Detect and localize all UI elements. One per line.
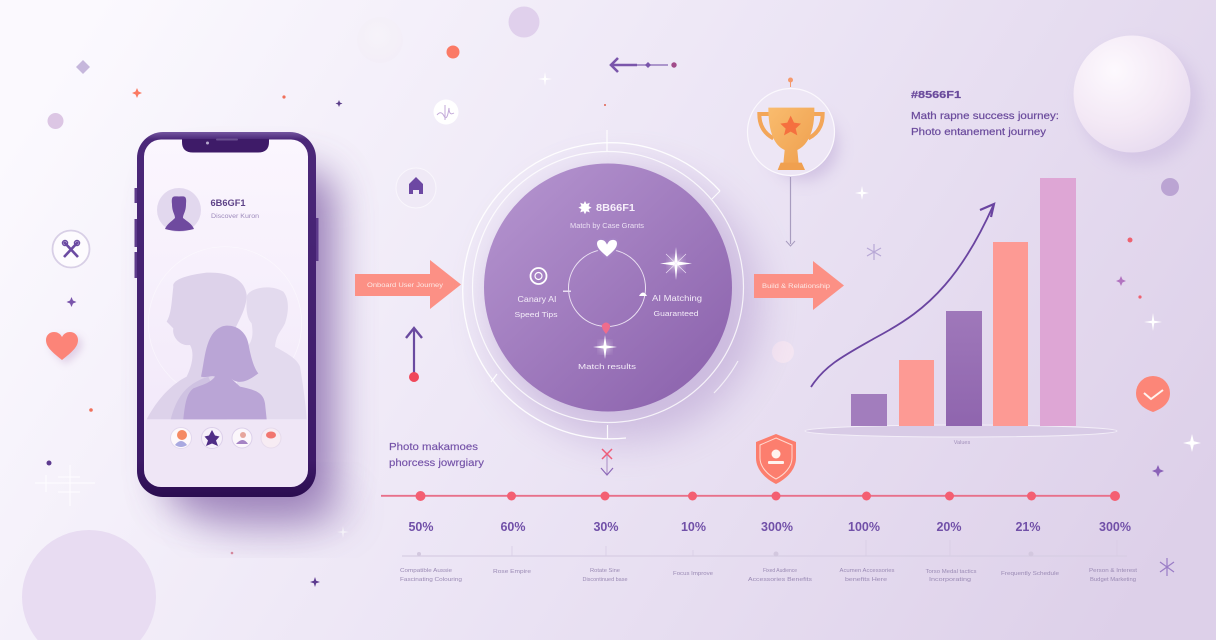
timeline labels: Person & Interest: [1089, 568, 1137, 574]
icon: red cross with arrow: [601, 449, 613, 475]
icon: check pin: [1136, 376, 1170, 412]
timeline labels: Budget Marketing: [1090, 577, 1136, 583]
sphere: large bottom left: [22, 530, 156, 640]
phone bottom bar: [146, 420, 306, 485]
timeline percentages: 20%: [936, 520, 962, 534]
arrow: coral to disc: Onboard User Journey: [367, 282, 444, 289]
timeline percentages: [408, 520, 1131, 534]
rings: [463, 130, 744, 439]
asterisks: [867, 244, 1174, 576]
chart base: [805, 425, 1117, 437]
people silhouettes: [147, 247, 307, 419]
panel: trophy badge: [748, 78, 838, 246]
chart heading: Math rapne success journey:: [911, 110, 1059, 122]
arrow: coral to chart: Build & Relationship: [762, 283, 830, 290]
label: left: Canary AI: [518, 295, 556, 304]
timeline labels: Focus Improve: [673, 571, 713, 577]
ring markers: [563, 290, 647, 296]
phone notch: [182, 138, 269, 152]
profile avatar: [157, 188, 201, 232]
connector arrow: [786, 177, 795, 246]
label: bottom: Match results: [578, 362, 636, 371]
profile text: [210, 198, 259, 220]
white sparkles: [337, 72, 1201, 538]
icon: shield: [756, 434, 796, 484]
badge shadow: [770, 112, 838, 180]
disc heading: 8B66F1: [596, 203, 635, 214]
disc subheading: Match by Case Grants: [570, 223, 645, 230]
icon: top sprout badge: [434, 100, 458, 124]
panel: central match disc: [463, 130, 760, 440]
timeline percentages: 60%: [500, 520, 526, 534]
chart heading: [911, 89, 1059, 138]
icon: sparkle bottom: [593, 335, 617, 359]
dot: lilac top: [508, 6, 540, 38]
timeline title: [389, 441, 485, 469]
timeline lower axis: [402, 540, 1127, 556]
sphere: large top right: [1074, 36, 1200, 164]
timeline axis dots: [417, 552, 1034, 556]
timeline labels: Fixed Audience: [763, 568, 797, 574]
trend arrow: [811, 204, 994, 387]
arrow: top left-pointing: [611, 58, 677, 72]
label: left: Speed Tips: [514, 312, 558, 319]
bars: [851, 178, 1076, 426]
timeline dots: [416, 491, 1120, 501]
disc: [484, 164, 732, 412]
timeline percentages: 50%: [408, 520, 434, 534]
timeline percentages: 10%: [681, 520, 706, 534]
disc shadow: [490, 170, 760, 440]
app icons: [170, 428, 281, 448]
sphere: faint top: [357, 17, 403, 63]
icon: camera ring: [530, 268, 546, 284]
timeline line: [381, 495, 1115, 497]
timeline labels: Fascinating Colouring: [400, 577, 462, 583]
icon: sparkle right: [660, 247, 692, 280]
timeline labels: Incorporating: [929, 577, 971, 583]
icon: pink pin: [602, 322, 610, 334]
timeline labels: Discontinued base: [582, 577, 628, 583]
chart heading: #8566F1: [911, 89, 961, 101]
dot: pink ball: [772, 341, 794, 363]
timeline: [381, 491, 1137, 583]
sparkle cluster bottom left: [35, 465, 95, 506]
profile text: 6B6GF1: [210, 198, 246, 209]
timeline labels: Accessories Benefits: [748, 577, 812, 583]
panel: phone: [134, 132, 350, 534]
disc heading: [578, 201, 635, 214]
icon: app coral: [261, 428, 281, 448]
icon: house badge: [396, 168, 436, 208]
timeline labels: [400, 568, 1137, 583]
timeline percentages: 100%: [848, 520, 880, 534]
phone shadow: [165, 170, 350, 534]
label: right: AI Matching: [652, 294, 702, 303]
phone frame: [137, 132, 316, 497]
inner ring: [568, 250, 646, 326]
phone screen: [144, 140, 308, 487]
profile text: Discover Kuron: [211, 214, 259, 220]
badge circle: [748, 88, 834, 176]
trophy: [759, 108, 823, 170]
orange pin: [788, 78, 793, 87]
timeline percentages: 21%: [1015, 520, 1041, 534]
arrow: coral to disc: [355, 260, 461, 309]
icon: app avatar: [232, 428, 252, 448]
timeline labels: Frequently Schedule: [1001, 571, 1059, 577]
chart caption: Values: [954, 440, 970, 446]
icon: tools badge: [52, 230, 90, 268]
dot: purple right: [1161, 178, 1179, 196]
timeline labels: Compatible Aussie: [400, 568, 452, 574]
label: right: Guaranteed: [654, 311, 699, 318]
icon: disc heart: [596, 239, 618, 258]
arrow: up with red dot: [406, 328, 422, 382]
dot: coral top: [446, 46, 460, 58]
label: left: [514, 295, 558, 319]
icon: app person: [170, 428, 192, 448]
phone side buttons: [134, 188, 318, 278]
bar chart: [805, 178, 1117, 446]
timeline percentages: 300%: [761, 520, 793, 534]
timeline labels: Rose Empire: [493, 569, 531, 575]
timeline percentages: 30%: [593, 520, 619, 534]
timeline percentages: 300%: [1099, 520, 1131, 534]
timeline title: Photo makamoes: [389, 441, 478, 453]
timeline title: phorcess jowrgiary: [389, 457, 485, 469]
dot: lilac left: [48, 113, 64, 129]
timeline labels: Torso Medal tactics: [926, 569, 977, 575]
timeline labels: Acumen Accessories: [840, 568, 895, 574]
label: right: [652, 294, 702, 318]
arrow: coral to chart: [754, 261, 844, 310]
timeline labels: Rotate Sine: [590, 568, 620, 574]
small accents: [46, 60, 1164, 587]
icon: app star: [202, 428, 222, 448]
icon: heart: [46, 332, 82, 364]
chart heading: Photo entanement journey: [911, 126, 1047, 138]
timeline labels: benefits Here: [845, 577, 887, 583]
